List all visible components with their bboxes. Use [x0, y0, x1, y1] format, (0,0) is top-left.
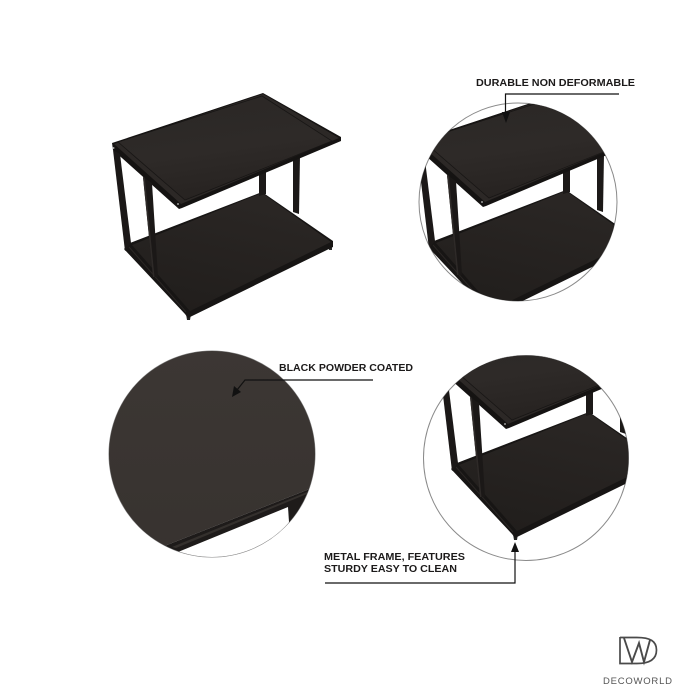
callout: black powder coated: BLACK POWDER COATED: [279, 362, 413, 374]
callout: durable non deformable: [476, 77, 635, 123]
callout: metal frame, features sturdy easy to clean: METAL FRAME, FEATURES: [324, 551, 465, 563]
callout: durable non deformable: DURABLE NON DEFORMABLE: [476, 77, 635, 89]
callout: black powder coated: [232, 362, 413, 397]
panel: main table product view: [112, 93, 341, 320]
callout: metal frame, features sturdy easy to clean: STURDY EASY TO CLEAN: [324, 563, 457, 575]
panel: surface finish close-up circle: [108, 350, 316, 558]
logo: decoworld: DECOWORLD: [603, 676, 672, 687]
panel: frame close-up circle: [423, 355, 629, 561]
panel: top table close-up circle: [418, 102, 618, 302]
callout: metal frame, features sturdy easy to clean: [324, 542, 519, 583]
logo: decoworld: [603, 637, 672, 687]
